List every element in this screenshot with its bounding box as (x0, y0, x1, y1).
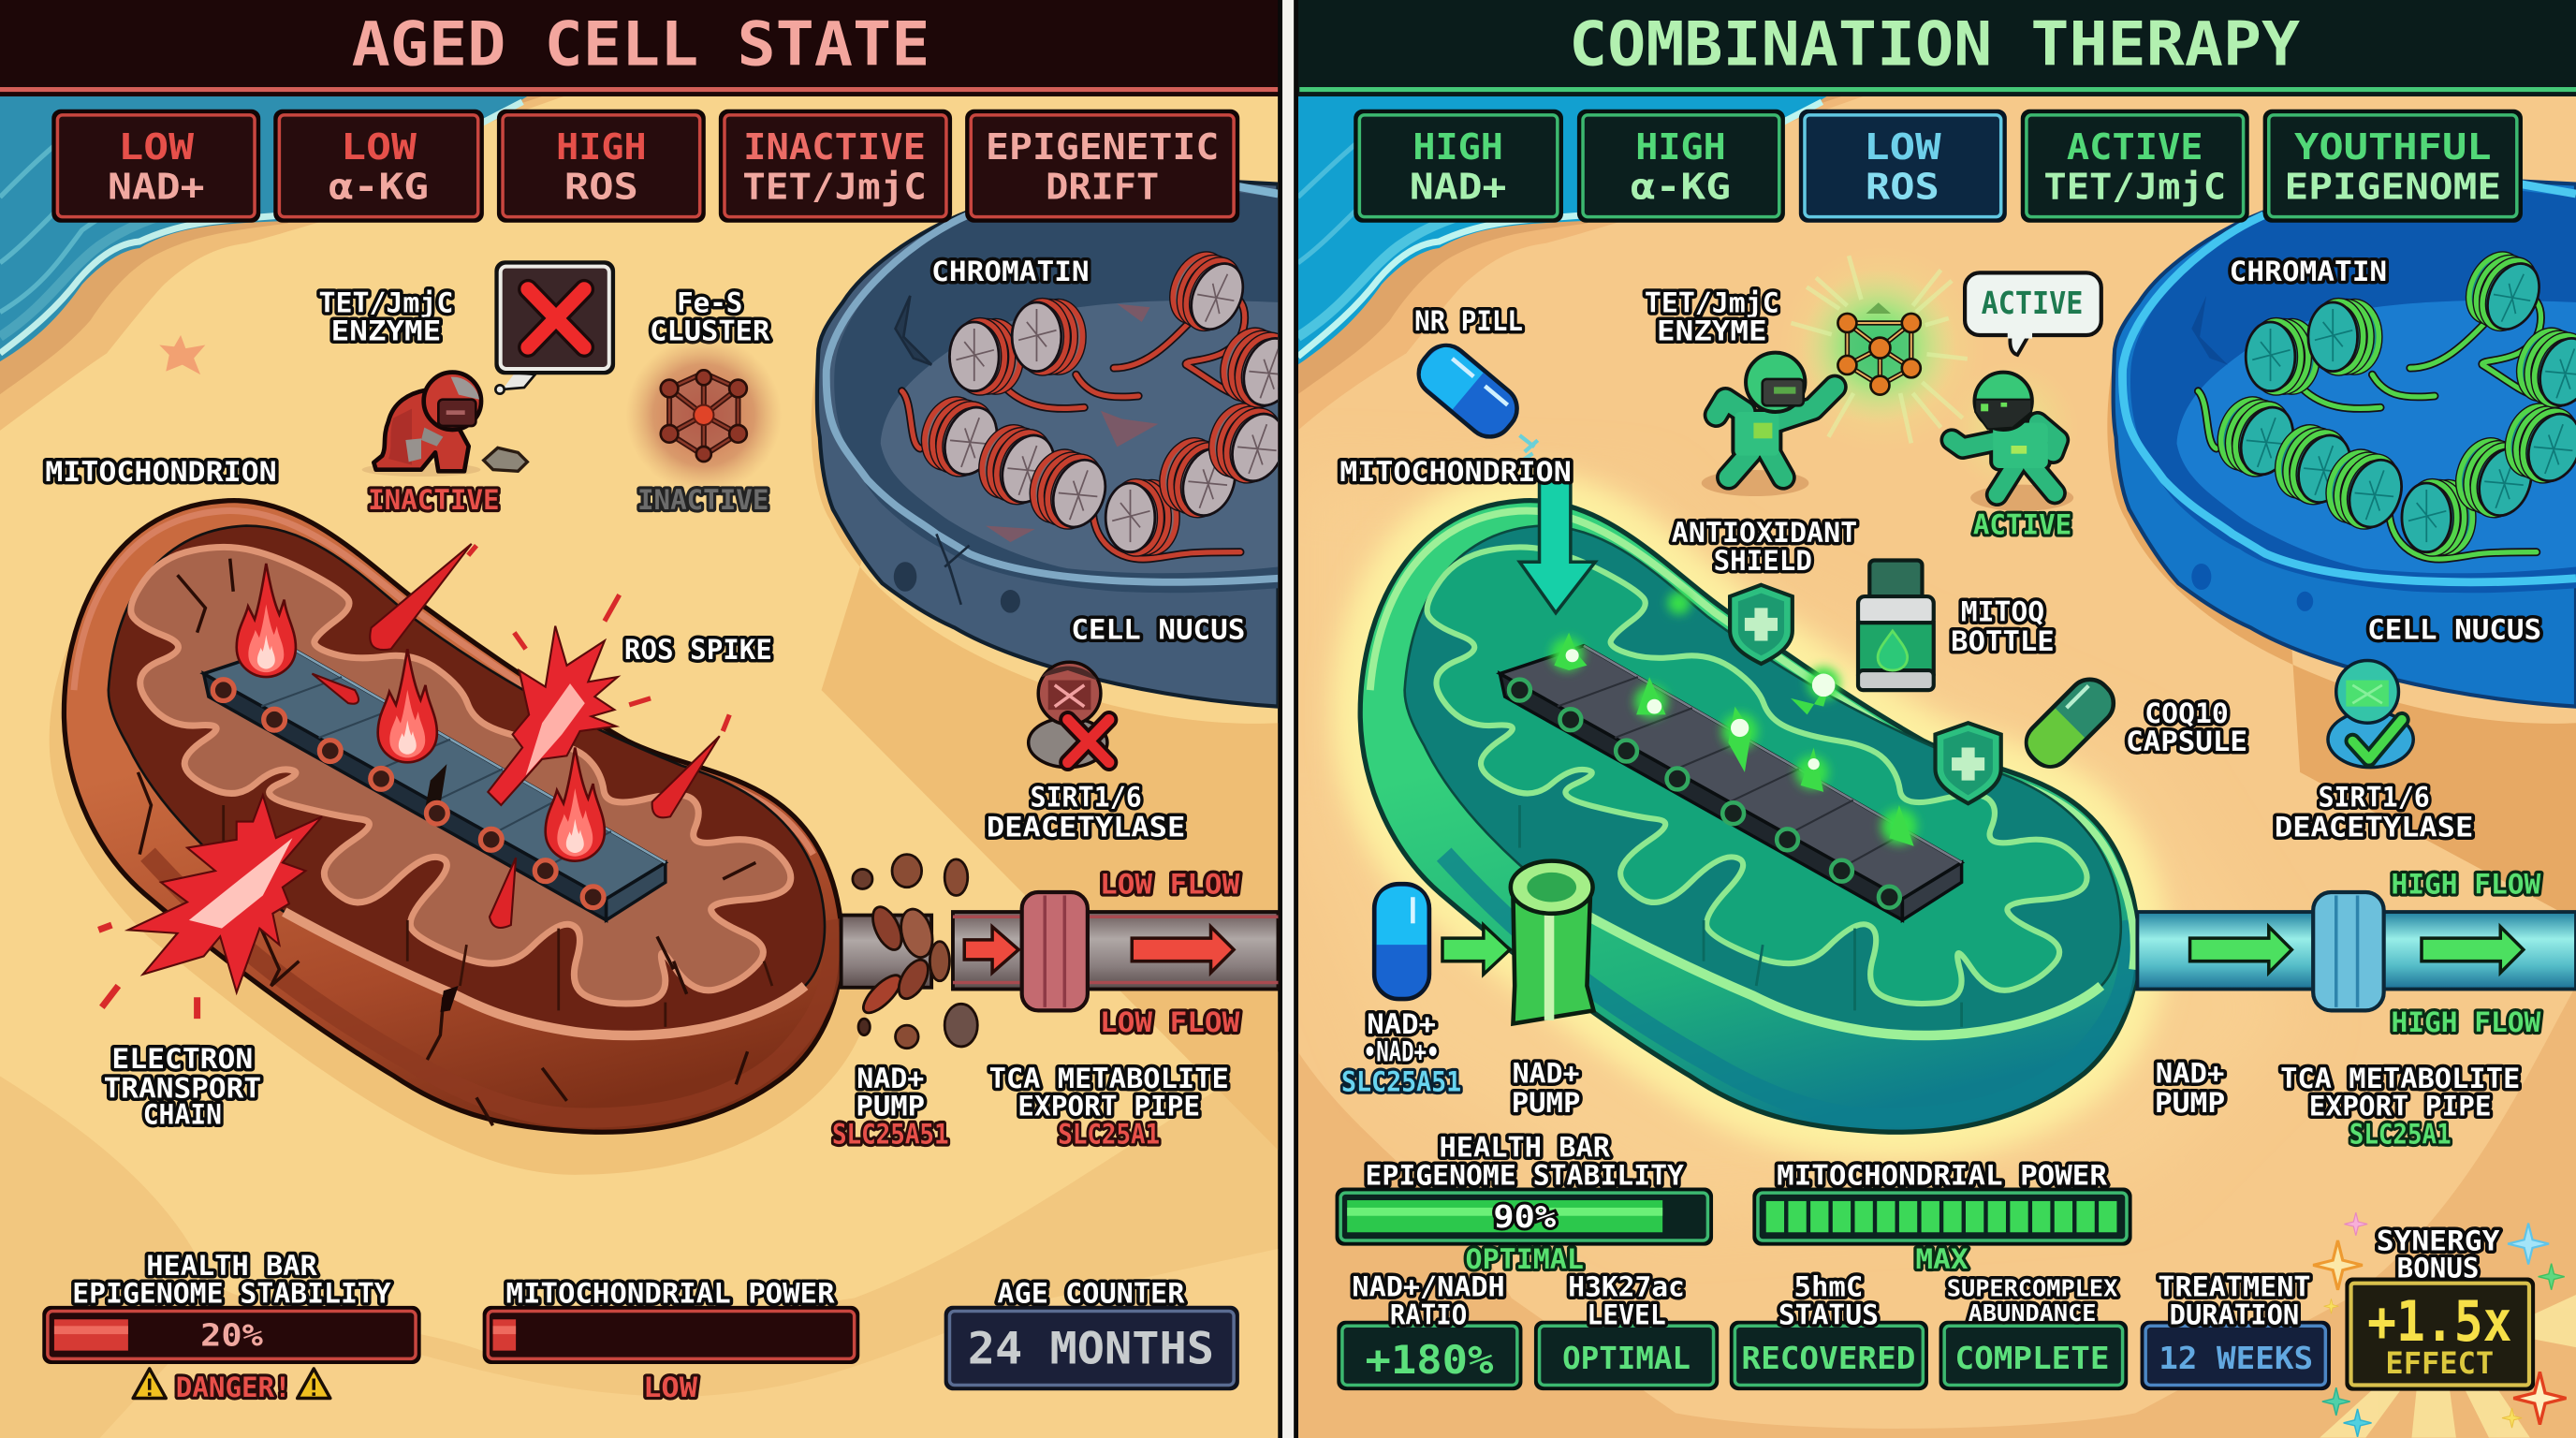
cracks (138, 559, 755, 1125)
label: NAD+ pump second (2155, 1058, 2225, 1119)
icon: antioxidant shield lower (1936, 723, 2001, 803)
status box: epigenetic drift (968, 111, 1237, 220)
label: SIRT1/6 deacetylase: SIRT1/6 (2318, 782, 2430, 814)
status box: high ROS: ROS (564, 166, 638, 208)
ROS needle spikes (312, 544, 729, 928)
nucleus rim (2122, 215, 2576, 582)
label: NAD+ pump: NAD+ (856, 1063, 924, 1094)
label: TCA metabolite export pipe: TCA METABOLITE (2280, 1063, 2520, 1094)
nucleosome 7 (1105, 482, 1177, 553)
label: MitoQ bottle: MITOQ (1961, 595, 2044, 627)
icon: inactive Fe-S cluster (625, 337, 782, 493)
status box: epigenetic drift: EPIGENETIC (986, 126, 1219, 169)
nucleus wall (2114, 181, 2576, 707)
nucleosome 3 (2459, 246, 2550, 338)
label: TET/JmjC enzyme: ENZYME (1657, 315, 1767, 346)
metric: treatment duration: TREATMENT (2158, 1271, 2311, 1303)
label: electron transport chain (104, 1043, 261, 1130)
status box: high NAD+ (1356, 111, 1560, 220)
status box: youthful epigenome (2265, 111, 2520, 220)
mitochondrion glow (1360, 501, 2138, 1132)
synergy bonus effect box: +1.5x (2367, 1290, 2512, 1355)
cristae (131, 547, 791, 1004)
label: CoQ10 capsule: CAPSULE (2126, 726, 2247, 757)
icon: antioxidant shield top (1730, 585, 1793, 664)
NAD+ pump (1511, 861, 1593, 1023)
label: active green: ACTIVE (1973, 508, 2071, 540)
header: combination therapy: COMBINATION THERAPY (1569, 10, 2300, 80)
health bar: epigenome stability: HEALTH BAR (146, 1250, 317, 1282)
status box: inactive TET/JmjC: INACTIVE (743, 126, 926, 169)
status box: low NAD+ (54, 111, 258, 220)
speech bubble with red X (495, 263, 613, 394)
metric: treatment duration: 12 WEEKS (2159, 1340, 2313, 1376)
label: TCA metabolite export pipe: EXPORT PIPE (2309, 1091, 2492, 1123)
nucleosome 1 (949, 321, 1020, 392)
TCA export pipe broken (842, 892, 1278, 1010)
nucleosome 10 (2510, 323, 2576, 414)
flow arrow large (1132, 927, 1234, 973)
mitochondrial power bar (1754, 1159, 2130, 1275)
nucleus floor (2177, 301, 2576, 573)
label: chromatin: CHROMATIN (931, 256, 1090, 287)
metric: NAD+/NADH ratio: NAD+/NADH (1352, 1271, 1505, 1303)
nucleosome 2 (2308, 301, 2378, 373)
speech bubble: active (1965, 272, 2101, 355)
cristae (1427, 547, 2087, 1004)
nucleosome 4 (2212, 392, 2303, 482)
label: TCA metabolite export pipe (989, 1063, 1229, 1150)
nucleosome 7 (2402, 482, 2472, 553)
ROS burst upper (488, 626, 618, 805)
header: aged cell state (0, 0, 1278, 96)
danger warning: DANGER! (176, 1372, 291, 1403)
label: SIRT1/6 deacetylase: DEACETYLASE (2275, 811, 2473, 843)
chromatin nucleosomes (902, 246, 1305, 559)
status box: low alpha-KG: α-KG (329, 166, 429, 208)
status box: high alpha-KG: α-KG (1631, 166, 1731, 208)
synergy bonus effect box: SYNERGY (2377, 1225, 2500, 1257)
right beach scene (1298, 95, 2576, 1438)
label: antioxidant shield (1672, 517, 1857, 577)
label: high flow bottom: HIGH FLOW (2392, 1006, 2541, 1038)
synergy bonus effect box: BONUS (2397, 1253, 2479, 1284)
label: high flow top: HIGH FLOW (2392, 869, 2541, 901)
status box: low ROS (1801, 111, 2004, 220)
mitochondrial power bar: MITOCHONDRIAL POWER (1777, 1159, 2108, 1191)
health bar: epigenome stability: 90% (1493, 1198, 1556, 1235)
panel: cell nucleus (812, 181, 1305, 1151)
metric: supercomplex abundance: SUPERCOMPLEX (1947, 1275, 2118, 1302)
metric: H3K27ac level: H3K27ac (1568, 1271, 1685, 1303)
icon: active Fe-S cluster with glow (1778, 246, 1984, 452)
health bar: epigenome stability: EPIGENOME STABILITY (1365, 1159, 1685, 1191)
status box: low ROS: LOW (1864, 126, 1942, 169)
metric: supercomplex abundance: ABUNDANCE (1969, 1299, 2097, 1327)
character: active enzyme (1947, 362, 2078, 511)
nucleus basin (2130, 191, 2576, 593)
mitochondrion: healthy (1360, 501, 2138, 1132)
label: NAD+ pump: NAD+ (1513, 1058, 1580, 1090)
metric: H3K27ac level (1536, 1271, 1717, 1388)
status box: active TET/JmjC: TET/JmjC (2043, 166, 2226, 208)
status box: low ROS: ROS (1866, 166, 1939, 208)
health bar: epigenome stability: 20% (200, 1316, 263, 1353)
character: inactive enzyme (362, 373, 481, 477)
label: NAD+ pump (1512, 1058, 1580, 1119)
mitochondrion shadow (50, 526, 871, 1175)
header: aged cell state: AGED CELL STATE (352, 10, 929, 80)
label: mitochondrion: MITOCHONDRION (1339, 456, 1572, 488)
nucleosome 3 (1163, 246, 1253, 338)
age counter (946, 1278, 1237, 1388)
arrow to NAD+ pump (1442, 925, 1510, 975)
metric: supercomplex abundance: COMPLETE (1955, 1340, 2110, 1376)
basin (1405, 526, 2121, 1035)
partition lines (224, 805, 772, 1027)
metric: NAD+/NADH ratio: RATIO (1390, 1299, 1467, 1331)
status box: high alpha-KG (1580, 111, 1782, 220)
sparkles (2313, 1212, 2566, 1437)
character: enzyme reaching for cluster (1702, 353, 1835, 496)
status box: epigenetic drift: DRIFT (1046, 166, 1159, 208)
rim highlight (285, 912, 805, 1035)
status box: youthful epigenome: YOUTHFUL (2294, 126, 2492, 169)
basin (109, 526, 825, 1035)
NR arrow into mitochondrion (1519, 479, 1595, 613)
label: chromatin: CHROMATIN (2230, 256, 2387, 287)
rim highlight (1580, 912, 2101, 1035)
danger warning (133, 1369, 330, 1403)
nucleosome 5 (2269, 420, 2360, 510)
metric: treatment duration: DURATION (2170, 1299, 2299, 1331)
nucleosome 4 (915, 392, 1006, 482)
metric: 5hmC status (1732, 1271, 1926, 1388)
speech bubble: active: ACTIVE (1982, 285, 2083, 321)
status box: high NAD+: NAD+ (1410, 166, 1506, 208)
center divider (1282, 0, 1294, 1438)
mitochondrial power bar: MAX (1915, 1243, 1969, 1275)
sparkle trail (1519, 435, 1538, 460)
metric: 5hmC status: 5hmC (1794, 1271, 1863, 1303)
label: NAD+ pump second: NAD+ (2156, 1058, 2224, 1090)
label: inactive red: INACTIVE (368, 484, 500, 516)
metric: H3K27ac level: LEVEL (1587, 1299, 1666, 1331)
nucleus rim (827, 215, 1278, 582)
nucleosome 6 (1024, 445, 1115, 536)
status box: low alpha-KG: LOW (341, 126, 417, 169)
rays behind synergy bonus (2320, 1295, 2576, 1438)
status box: active TET/JmjC: ACTIVE (2067, 126, 2203, 169)
mitochondrial power bar (485, 1278, 857, 1403)
icon: CoQ10 capsule (2018, 670, 2122, 775)
nucleus wall (817, 181, 1278, 707)
label: NAD+ pump: SLC25A51 (832, 1118, 949, 1150)
icon: starfish (159, 335, 205, 374)
label: antioxidant shield: SHIELD (1714, 545, 1812, 577)
nucleus basin (834, 191, 1278, 593)
flow arrow small (964, 927, 1018, 973)
panel: aged cell state (0, 0, 1305, 1438)
label: TCA metabolite export pipe: EXPORT PIPE (1017, 1091, 1200, 1123)
status box: high alpha-KG: HIGH (1635, 126, 1726, 169)
metric: treatment duration (2143, 1271, 2329, 1388)
nucleosome 8 (1154, 433, 1244, 523)
label: NAD+ pump second: PUMP (2155, 1087, 2225, 1119)
mitochondrial power bar: LOW (643, 1372, 698, 1403)
label: TET/JmjC enzyme (1645, 286, 1779, 346)
label: low flow top: LOW FLOW (1100, 869, 1240, 901)
mitochondrion: damaged (64, 501, 842, 1132)
status box: low NAD+: LOW (118, 126, 195, 169)
nucleosome 2 (1012, 301, 1083, 373)
metric: NAD+/NADH ratio (1339, 1271, 1520, 1388)
label: NAD+ NAD+ SLC25A51: SLC25A51 (1341, 1065, 1461, 1097)
linker DNA (2198, 295, 2541, 559)
label: mitochondrion: MITOCHONDRION (45, 456, 277, 488)
partition lines (1519, 805, 1962, 1027)
flow arrow (2190, 927, 2291, 973)
nucleus shadow (811, 371, 1279, 1150)
status box: inactive TET/JmjC: TET/JmjC (742, 166, 927, 208)
label: TCA metabolite export pipe (2280, 1063, 2520, 1150)
label: TET/JmjC enzyme: ENZYME (331, 315, 441, 346)
status box: high ROS (500, 111, 703, 220)
ROS burst lower (98, 795, 322, 1019)
electron transport chain healthy (1500, 646, 1962, 920)
label: low flow bottom: LOW FLOW (1100, 1006, 1240, 1038)
nucleosome 1 (2246, 321, 2317, 392)
label: CoQ10 capsule (2126, 697, 2247, 757)
status box: low NAD+: NAD+ (108, 166, 205, 208)
label: NAD+ pump (832, 1063, 949, 1150)
status box: inactive TET/JmjC (721, 111, 949, 220)
label: NAD+ pump: PUMP (856, 1091, 925, 1123)
nucleosome 10 (1215, 323, 1305, 414)
health bar: epigenome stability (44, 1250, 419, 1362)
label: electron transport chain: CHAIN (143, 1098, 222, 1130)
status box: low alpha-KG (276, 111, 481, 220)
label: CoQ10 capsule: COQ10 (2144, 697, 2229, 729)
green energy glows (1551, 592, 1917, 846)
label: electron transport chain: TRANSPORT (104, 1072, 261, 1104)
left beach scene (0, 95, 1278, 1438)
metric: H3K27ac level: OPTIMAL (1562, 1340, 1690, 1376)
label: TCA metabolite export pipe: TCA METABOLITE (989, 1063, 1229, 1094)
label: antioxidant shield: ANTIOXIDANT (1672, 517, 1857, 549)
metric: supercomplex abundance (1941, 1275, 2126, 1388)
debris at pipe break (853, 855, 977, 1049)
label: SIRT1/6 deacetylase (2275, 782, 2473, 843)
nucleosome 6 (2320, 445, 2410, 536)
status box: high ROS: HIGH (556, 126, 647, 169)
label: TET/JmjC enzyme (318, 286, 453, 346)
mitochondrial power bar: MITOCHONDRIAL POWER (506, 1278, 835, 1310)
metric: NAD+/NADH ratio: +180% (1365, 1337, 1494, 1383)
label: SIRT1/6 deacetylase (987, 782, 1185, 843)
age counter: AGE COUNTER (997, 1278, 1185, 1310)
metric: 5hmC status: RECOVERED (1741, 1340, 1915, 1376)
label: SIRT1/6 deacetylase: SIRT1/6 (1030, 782, 1142, 814)
panel: combination therapy (1298, 0, 2576, 1438)
health bar: epigenome stability (1338, 1132, 1711, 1275)
icon: NAD+ capsule (1374, 884, 1429, 999)
nucleosome 9 (1203, 399, 1294, 489)
health bar: epigenome stability: EPIGENOME STABILITY (72, 1278, 391, 1310)
electron transport chain (204, 646, 666, 920)
label: Fe-S cluster (650, 286, 770, 346)
label: NAD+ pump: PUMP (1512, 1087, 1580, 1119)
label: SIRT1/6 deacetylase: DEACETYLASE (987, 811, 1185, 843)
label: TCA metabolite export pipe: SLC25A1 (2349, 1118, 2452, 1150)
label: electron transport chain: ELECTRON (111, 1043, 253, 1075)
SIRT1/6 deacetylase active (2328, 661, 2413, 768)
label: Fe-S cluster: CLUSTER (650, 315, 770, 346)
label: TET/JmjC enzyme: TET/JmjC (1645, 286, 1779, 318)
status box: active TET/JmjC (2023, 111, 2247, 220)
rock debris (484, 448, 527, 471)
status box: high NAD+: HIGH (1412, 126, 1503, 169)
label: MitoQ bottle: BOTTLE (1951, 625, 2055, 657)
synergy bonus effect box: EFFECT (2385, 1347, 2494, 1381)
nucleosome 8 (2450, 433, 2540, 523)
nucleosome 9 (2499, 399, 2576, 489)
label: Fe-S cluster: Fe-S (677, 286, 742, 318)
damage marks (896, 296, 970, 605)
label: ROS spike: ROS SPIKE (624, 634, 772, 666)
nucleus shadow (2107, 222, 2576, 920)
label: NR pill: NR PILL (1414, 305, 1523, 337)
nucleus floor (881, 301, 1278, 573)
label: TET/JmjC enzyme: TET/JmjC (318, 286, 453, 318)
label: MitoQ bottle (1951, 595, 2055, 657)
label: NAD+ NAD+ SLC25A51: NAD+ (1367, 1008, 1436, 1040)
label: NAD+ NAD+ SLC25A51 (1341, 1008, 1461, 1097)
header: combination therapy (1298, 0, 2576, 96)
flow arrow second (2422, 927, 2524, 973)
health bar: epigenome stability: HEALTH BAR (1439, 1132, 1611, 1164)
label: cell nucleus: CELL NUCUS (2367, 614, 2541, 646)
status box: youthful epigenome: EPIGENOME (2284, 166, 2501, 208)
icon: MitoQ bottle (1858, 560, 1934, 690)
chromatin nucleosomes healthy (2198, 246, 2576, 559)
label: inactive gray: INACTIVE (637, 484, 768, 516)
metric: 5hmC status: STATUS (1778, 1299, 1879, 1331)
TCA export pipe healthy (2137, 892, 2576, 1010)
label: NAD+ NAD+ SLC25A51: •NAD+• (1364, 1036, 1439, 1068)
nucleosome 5 (973, 420, 1063, 510)
synergy bonus effect box (2348, 1225, 2532, 1388)
panel: cell nucleus healthy (2107, 181, 2576, 920)
label: TCA metabolite export pipe: SLC25A1 (1058, 1118, 1160, 1150)
label: cell nucleus: CELL NUCUS (1071, 614, 1245, 646)
SIRT1/6 deacetylase inactive (1029, 662, 1109, 768)
age counter: 24 MONTHS (968, 1324, 1214, 1375)
icon: NR pill capsule (1410, 336, 1527, 446)
linker DNA (902, 295, 1245, 559)
ROS flames (237, 564, 605, 861)
health bar: epigenome stability: OPTIMAL (1466, 1243, 1584, 1275)
